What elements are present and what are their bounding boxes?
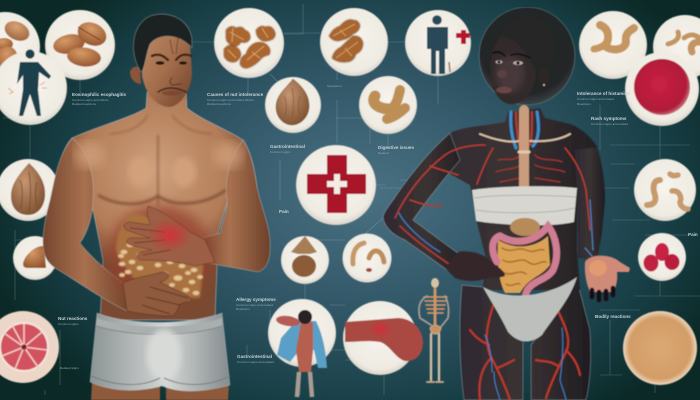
label: reactions: Nut reactions	[58, 316, 88, 321]
text labels: Common signs and related effects	[207, 98, 254, 102]
circle: capped nut	[281, 236, 329, 284]
woman hair	[479, 7, 575, 105]
woman chest bandage	[472, 186, 577, 225]
circle: almond, small left	[13, 236, 57, 280]
text labels	[58, 84, 698, 370]
man right arm	[197, 140, 270, 272]
woman left arm	[383, 133, 470, 277]
label: bodily: Bodily reactions	[595, 314, 631, 319]
label: causes: Causes of nut intolerance	[207, 92, 264, 97]
woman legs	[460, 280, 591, 400]
text labels: Common signs	[58, 322, 79, 326]
circle: beige skin patch	[623, 311, 697, 385]
text labels: Common signs and related	[237, 360, 274, 364]
label: nut symptoms: Eosinophilic esophagitis	[72, 92, 127, 97]
circle: whole walnut	[265, 77, 321, 133]
woman torso	[420, 108, 605, 290]
text labels: Related reactions	[72, 102, 97, 106]
woman figure	[383, 7, 630, 400]
woman right hand	[585, 256, 630, 300]
woman right arm	[575, 147, 605, 260]
man legs	[91, 382, 229, 400]
circle: walnut halves	[320, 8, 388, 76]
text labels: Reactions	[577, 102, 591, 106]
label: intolerance: Intolerance of histamine	[577, 91, 630, 96]
text labels: Common signs and related	[591, 122, 628, 126]
woman leg veins	[470, 306, 580, 400]
text labels: Related	[378, 151, 389, 155]
text labels: Common signs and effects	[72, 98, 109, 102]
man figure	[43, 14, 270, 400]
woman briefs	[483, 277, 577, 341]
circle: peanuts	[359, 76, 417, 134]
text labels: Reactions	[236, 307, 250, 311]
text labels: Common signs and related	[577, 97, 614, 101]
label: pain: Pain	[279, 209, 289, 214]
woman arm and chest veins	[395, 145, 593, 268]
skeleton figure	[419, 278, 449, 382]
text labels: Related reactions	[207, 102, 232, 106]
woman hip hand	[445, 251, 505, 281]
man head	[130, 14, 192, 107]
circle: walnut pieces	[214, 8, 284, 78]
man abdomen rash with beans	[108, 205, 212, 305]
man lower hand	[123, 272, 191, 316]
man muscle shading	[98, 115, 226, 205]
label: related: Related signs	[60, 366, 79, 370]
circle: grapefruit cross-section	[0, 311, 59, 383]
text labels: Common signs and related	[236, 303, 273, 307]
circle: almonds and nuts, top left	[0, 12, 40, 82]
label: gastro lower: Gastrointestinal	[237, 354, 272, 359]
circle: curved nuts, right	[634, 159, 696, 221]
label: symptoms small: Symptoms	[327, 84, 342, 88]
circle: curved nuts, far top right	[653, 15, 700, 79]
label: digestive: Digestive issues	[378, 145, 414, 150]
circle: person with pain icon	[0, 49, 67, 125]
circle: walnut, left	[0, 159, 59, 221]
circle: person and red cross icon	[405, 10, 471, 76]
label: rash: Rash symptoms	[591, 116, 627, 121]
circle: curved nuts, top right	[579, 11, 647, 79]
circle: raspberries	[638, 233, 686, 281]
circle: almonds	[45, 10, 115, 80]
circle: curved nuts, center	[342, 234, 392, 282]
woman intestines	[493, 218, 557, 297]
circle: woman in blue coat	[268, 299, 336, 397]
woman face	[490, 36, 549, 104]
label: allergy: Allergy symptoms	[236, 297, 276, 302]
label: gastrointestinal: Gastrointestinal	[270, 144, 305, 149]
man upper hand	[124, 206, 215, 266]
man torso and neck	[53, 90, 257, 320]
circle: red lesion	[625, 52, 699, 126]
man left arm	[43, 138, 135, 311]
text labels: Common signs	[270, 150, 291, 154]
man shorts	[90, 313, 230, 391]
label: right pain: Pain	[688, 232, 698, 237]
circle: inflamed wrist	[343, 301, 423, 375]
circle: red cross	[296, 145, 376, 225]
woman neck vessels and trachea	[480, 110, 570, 187]
